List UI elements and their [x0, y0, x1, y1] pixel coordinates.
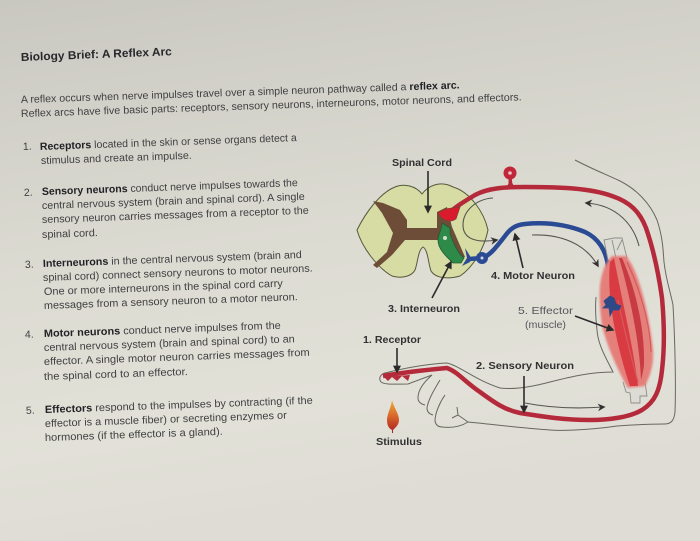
arm outline	[380, 160, 675, 430]
list item 4: motor neurons: central nervous system (brain and spinal cord) to an	[44, 333, 295, 354]
list item 4: motor neurons: Motor neurons conduct nerve impulses from the	[44, 320, 281, 340]
list item 3: interneurons: messages from a sensory neuron to a motor neuron.	[44, 291, 298, 312]
spinal cord cross-section	[357, 184, 488, 278]
list item 2: sensory neurons: sensory neuron carries messages from a receptor to the	[42, 205, 309, 226]
list item 1: receptors: stimulus and create an impulse.	[41, 150, 192, 167]
motor end plate	[603, 296, 621, 316]
list item 4: motor neurons	[25, 320, 310, 383]
stimulus flame	[387, 400, 399, 433]
list item 3: interneurons: 3.	[25, 259, 34, 271]
sensory neuron cell body	[504, 166, 516, 187]
motor neuron (blue)	[469, 223, 610, 300]
list item 1: receptors: Receptors located in the skin or sense organs detect a	[40, 132, 297, 153]
list item 3: interneurons: spinal cord) connect sensory neurons to motor neurons.	[43, 263, 313, 284]
list item 2: sensory neurons: 2.	[24, 187, 33, 199]
grey matter	[373, 201, 465, 268]
list item 4: motor neurons: 4.	[25, 329, 34, 341]
list item 5: effectors: effector is a muscle fiber) or secreting enzymes or	[45, 410, 287, 430]
label: spinal cord: Spinal Cord	[392, 157, 452, 169]
reflex arc diagram	[357, 157, 675, 448]
intro paragraph: Reflex arcs have five basic parts: receptors, sensory neurons, interneurons, motor neurons, and effectors.	[21, 91, 522, 120]
tendons	[604, 238, 647, 403]
intro paragraph: A reflex occurs when nerve impulses travel over a simple neuron pathway called a reflex arc.	[21, 79, 460, 106]
receptor ending	[384, 375, 410, 381]
list item 2: sensory neurons: spinal cord.	[42, 227, 98, 241]
sensory neuron (red)	[383, 187, 664, 420]
label: sensory neuron: 2. Sensory Neuron	[476, 360, 574, 372]
list item 5: effectors: hormones (if the effector is a gland).	[45, 426, 223, 444]
list item 3: interneurons: Interneurons in the central nervous system (brain and	[43, 249, 302, 270]
list item 5: effectors: Effectors respond to the impulses by contracting (if the	[45, 395, 313, 416]
label: effector	[518, 305, 574, 331]
list item 5: effectors	[26, 395, 313, 444]
title: Biology Brief: A Reflex Arc	[21, 46, 173, 64]
list item 5: effectors: 5.	[26, 405, 35, 417]
label: interneuron: 3. Interneuron	[388, 303, 460, 315]
impulse direction arrows	[463, 198, 639, 408]
list item 3: interneurons: One or more interneurons in the spinal cord carry	[44, 278, 284, 298]
list item 3: interneurons	[25, 249, 313, 312]
list item 2: sensory neurons	[24, 177, 309, 241]
intro paragraph	[21, 79, 522, 120]
list item 2: sensory neurons: central nervous system (brain and spinal cord). A single	[42, 191, 305, 212]
list item 1: receptors	[23, 132, 297, 167]
list item 2: sensory neurons: Sensory neurons conduct nerve impulses towards the	[42, 177, 298, 198]
label: stimulus: Stimulus	[376, 436, 422, 448]
interneuron (green)	[438, 223, 464, 263]
label: effector: (muscle)	[525, 319, 566, 331]
list item 4: motor neurons: effector. A single motor neuron carries messages from	[44, 347, 310, 368]
list item 4: motor neurons: the spinal cord to an effector.	[44, 366, 188, 383]
muscle effector	[600, 238, 653, 403]
label: effector: 5. Effector	[518, 305, 574, 317]
label: motor neuron: 4. Motor Neuron	[491, 270, 575, 282]
list item 1: receptors: 1.	[23, 141, 32, 153]
label: receptor: 1. Receptor	[363, 334, 421, 346]
label pointers	[397, 171, 613, 412]
